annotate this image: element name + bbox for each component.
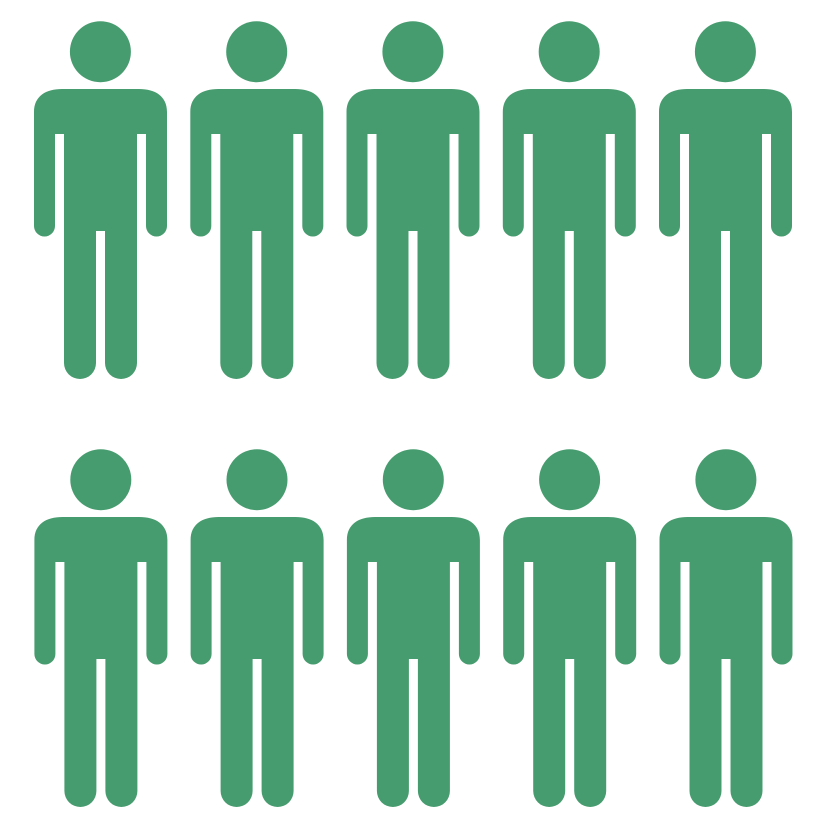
icon: person row 1 column 2 [190, 21, 323, 379]
icon: person row 1 column 4 [503, 21, 636, 379]
icon: person row 2 column 4 [503, 449, 636, 807]
icon: person row 2 column 3 [347, 449, 480, 807]
icon: person row 1 column 1 [34, 21, 167, 379]
icon: person row 2 column 2 [191, 449, 324, 807]
icon: person row 2 column 5 [660, 449, 792, 807]
icon: person row 1 column 5 [659, 21, 792, 379]
icon: person row 1 column 3 [346, 21, 480, 379]
icon: person row 2 column 1 [34, 449, 167, 807]
